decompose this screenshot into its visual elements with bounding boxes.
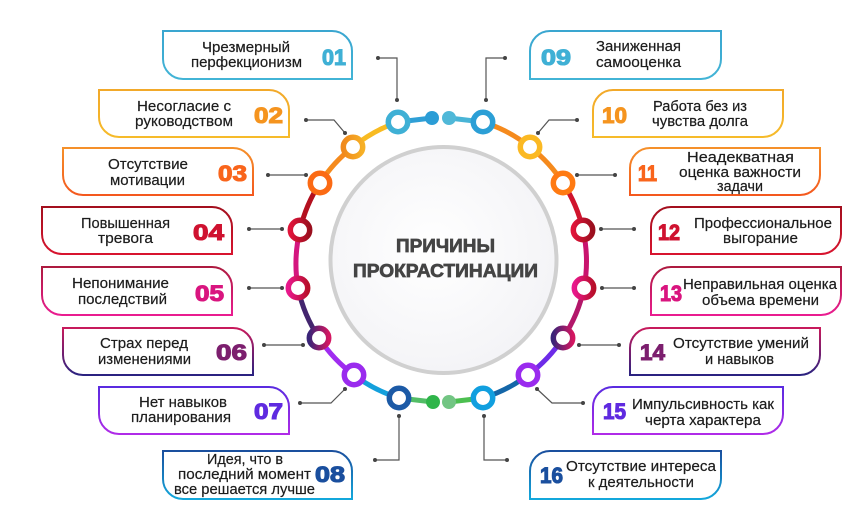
central circle with title (330, 147, 556, 373)
panel: 04 (42, 207, 232, 254)
panel: 02: Несогласие с (137, 98, 232, 115)
panel: 04: Повышенная (81, 215, 170, 232)
panel: 10: 10 (602, 103, 627, 128)
panel: 11 (630, 148, 820, 195)
panel: 12: 12 (658, 220, 680, 245)
panel: 09: Заниженная (596, 38, 681, 55)
panel: 03 (63, 148, 253, 195)
panel: 02: руководством (135, 113, 233, 130)
panel: 08 (163, 451, 352, 499)
panel: 02 (99, 90, 289, 137)
panel: 08: все решается лучше (174, 481, 315, 498)
panel: 15 (593, 387, 783, 434)
panel: 14: 14 (640, 340, 666, 365)
panel: 07: Нет навыков (139, 394, 227, 411)
panel: 15: Импульсивность как (632, 396, 774, 413)
panel: 10: Работа без из (653, 98, 747, 115)
panel: 08: последний момент (178, 466, 311, 483)
panel: 16: к деятельности (588, 474, 694, 491)
panel: 07: планирования (131, 409, 231, 426)
panel: 05 (42, 267, 232, 315)
panel: 09: самооценка (596, 54, 682, 71)
panel: 01 (163, 31, 352, 79)
panel: 03: 03 (218, 161, 247, 186)
panel: 06: 06 (216, 340, 247, 365)
panel: 11: оценка важности (679, 164, 801, 181)
panel: 09: 09 (541, 45, 571, 70)
panel: 13: Неправильная оценка (683, 276, 838, 293)
panel: 11: задачи (717, 178, 763, 195)
panel: 12 (651, 207, 841, 254)
panel: 14 (630, 328, 820, 375)
panel: 08: Идея, что в (207, 451, 283, 468)
panel: 01: 01 (322, 45, 346, 70)
title: ПРОКРАСТИНАЦИИ (353, 261, 538, 281)
panel: 06: изменениями (98, 351, 191, 368)
title: ПРИЧИНЫ (396, 236, 495, 256)
title (353, 236, 538, 281)
panel: 04: 04 (193, 220, 225, 245)
panel: 04: тревога (98, 230, 154, 247)
ring segments (296, 111, 586, 409)
timeline ring (288, 111, 594, 409)
panel: 02: 02 (254, 103, 283, 128)
panel: 08: 08 (315, 462, 345, 487)
ring nodes (288, 112, 594, 408)
panel: 01: перфекционизм (191, 54, 302, 71)
panel: 10: чувства долга (652, 113, 749, 130)
panel: 03: Отсутствие (108, 156, 188, 173)
panel: 05: последствий (78, 291, 167, 308)
panel: 13: 13 (660, 281, 682, 306)
panel: 01: Чрезмерный (202, 39, 290, 56)
panel: 05: 05 (195, 281, 224, 306)
panel: 16: 16 (540, 463, 563, 488)
panel: 09 (530, 31, 721, 79)
panel: 12: выгорание (723, 230, 798, 247)
panel: 07: 07 (254, 399, 283, 424)
panel: 16: Отсутствие интереса (566, 458, 717, 475)
panel: 03: мотивации (110, 172, 185, 189)
panel: 16 (530, 451, 721, 499)
panel: 15: черта характера (645, 412, 762, 429)
panel: 11: Неадекватная (687, 149, 794, 166)
panel: 14: и навыков (705, 351, 774, 368)
panel: 12: Профессиональное (694, 215, 832, 232)
panel: 13 (651, 267, 841, 315)
panel: 10 (593, 90, 783, 137)
panel: 11: 11 (638, 161, 657, 186)
panel: 05: Непонимание (72, 275, 169, 292)
panel: 07 (99, 387, 289, 434)
panel: 15: 15 (603, 399, 626, 424)
panel: 13: объема времени (702, 292, 819, 309)
panel: 06 (63, 328, 253, 375)
panel: 14: Отсутствие умений (673, 335, 809, 352)
panel: 06: Страх перед (100, 335, 188, 352)
connectors (247, 56, 636, 462)
